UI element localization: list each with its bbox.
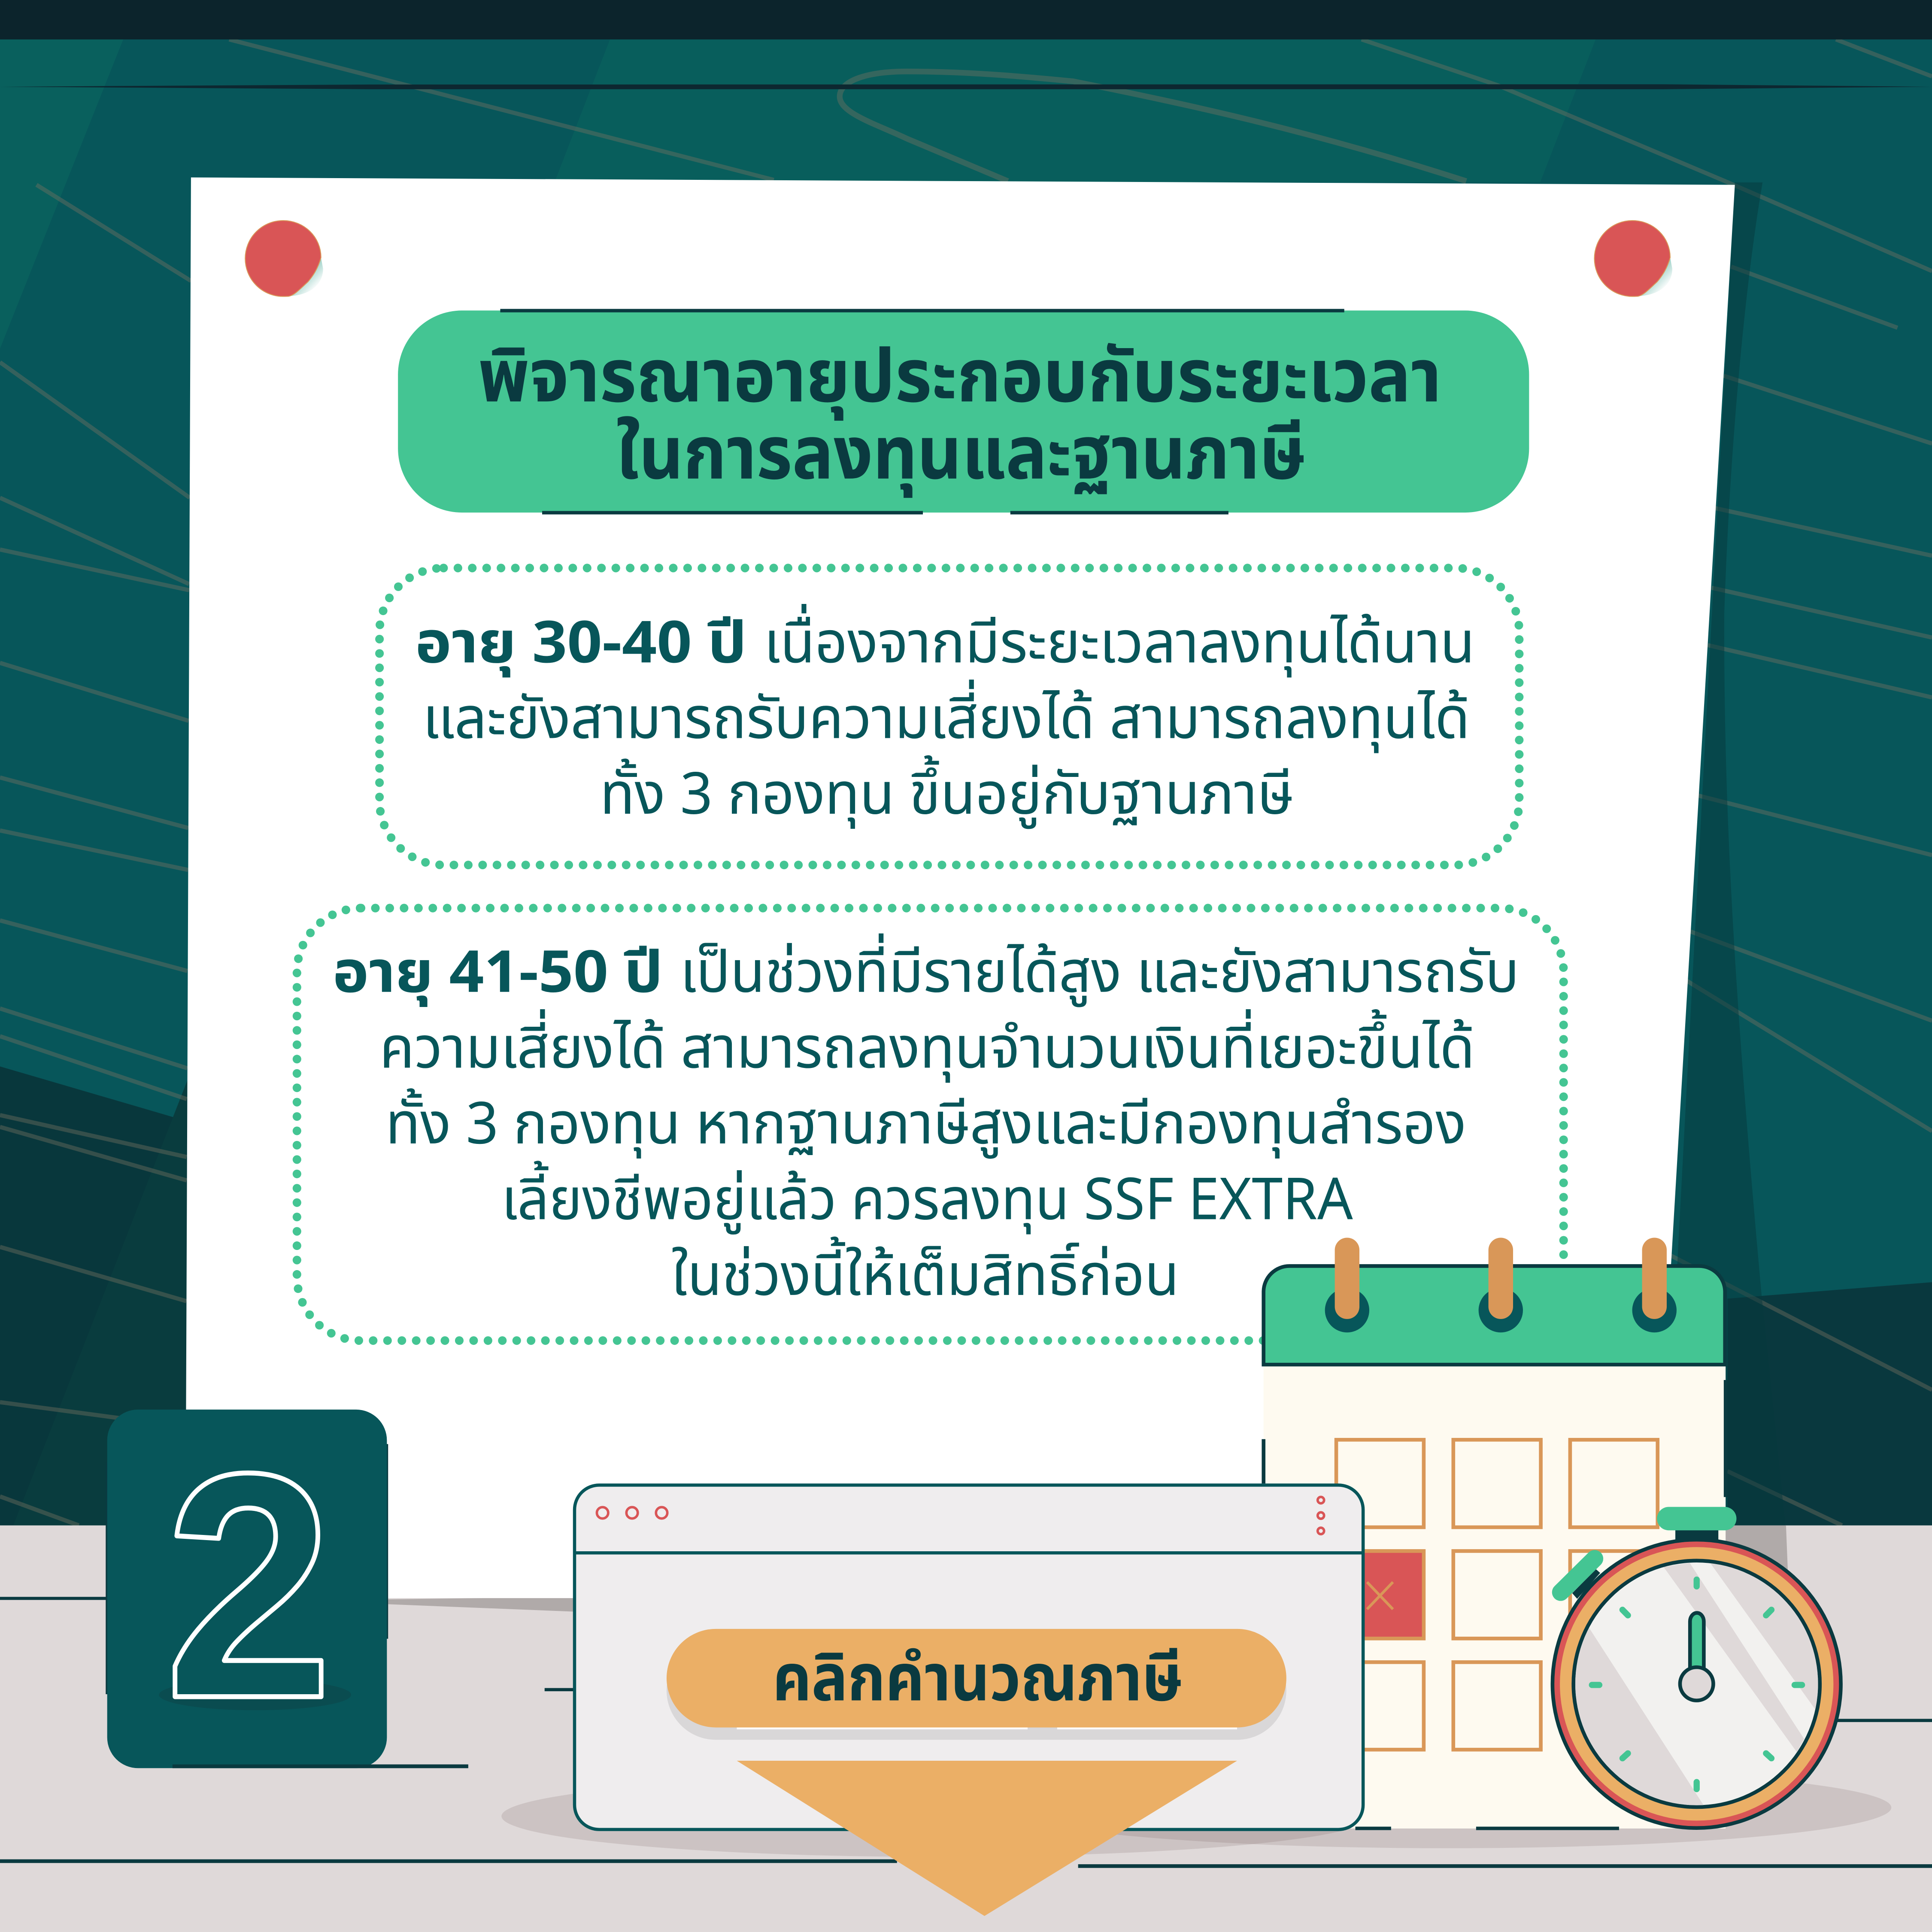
age 41-50 text: อายุ 41-50 ปี <box>333 931 663 1018</box>
calendar <box>1262 1237 1727 1830</box>
age 30-40 text: และยังสามารถรับความเสี่ยงได้ สามารถลงทุนได้ <box>423 676 1470 764</box>
paper shadow <box>1663 182 1785 1526</box>
age 41-50 text: ทั้ง 3 กองทุน หากฐานภาษีสูงและมีกองทุนสำรอง <box>385 1082 1466 1170</box>
calendar cross <box>1367 1582 1393 1609</box>
stopwatch hand <box>1680 1613 1713 1701</box>
number card <box>106 1407 468 1768</box>
top bar <box>0 0 1932 39</box>
stopwatch ticks <box>1592 1580 1802 1789</box>
age 41-50 text: เลี้ยงชีพอยู่แล้ว ควรลงทุน SSF EXTRA <box>501 1158 1353 1245</box>
number 2: 2 <box>164 1407 333 1765</box>
button label: คลิกคำนวณภาษี <box>773 1632 1183 1730</box>
browser window <box>574 1485 1363 1829</box>
title text: ในการลงทุนและฐานภาษี <box>616 400 1306 512</box>
age 30-40 text <box>415 601 1475 840</box>
stopwatch side button <box>1561 1559 1600 1599</box>
stopwatch <box>1551 1507 1843 1830</box>
pin: left <box>245 221 323 297</box>
panel: age 41-50 <box>297 908 1564 1341</box>
age 30-40 text: ทั้ง 3 กองทุน ขึ้นอยู่กับฐานภาษี <box>600 752 1294 840</box>
floor ellipse shadows <box>501 1767 1891 1857</box>
stopwatch rings <box>1551 1538 1843 1830</box>
paper sheet <box>185 177 1735 1598</box>
window dots <box>597 1497 1324 1534</box>
title text <box>478 323 1442 512</box>
stopwatch top button <box>1657 1507 1736 1545</box>
age 30-40 text: อายุ 30-40 ปี <box>415 601 747 688</box>
age 41-50 text: เป็นช่วงที่มีรายได้สูง และยังสามารถรับ <box>680 931 1519 1018</box>
background: teal wall <box>0 0 1932 1528</box>
calendar rings <box>1325 1237 1677 1332</box>
calendar header <box>1264 1266 1725 1365</box>
title text: พิจารณาอายุประกอบกับระยะเวลา <box>478 323 1442 435</box>
floor shadow of paper <box>388 1597 574 1612</box>
floor shadow right <box>1725 1526 1789 1602</box>
panel: age 30-40 <box>379 568 1519 865</box>
age 41-50 text <box>333 931 1519 1321</box>
stopwatch face reflections <box>1575 1562 1818 1805</box>
title pill <box>398 309 1529 514</box>
pin: right <box>1594 221 1672 297</box>
calendar grid <box>1336 1440 1658 1750</box>
floor lines <box>0 1597 1932 1868</box>
button <box>667 1629 1286 1740</box>
floor <box>0 1526 1932 1932</box>
age 41-50 text: ในช่วงนี้ให้เต็มสิทธิ์ก่อน <box>671 1234 1179 1321</box>
background: chalk lines <box>0 39 1932 1526</box>
age 41-50 text: ความเสี่ยงได้ สามารถลงทุนจำนวนเงินที่เยอะขึ้นได้ <box>379 1006 1475 1094</box>
horizon line <box>0 84 1932 89</box>
arrow down <box>737 1761 1237 1916</box>
age 30-40 text: เนื่องจากมีระยะเวลาลงทุนได้นาน <box>764 601 1475 688</box>
